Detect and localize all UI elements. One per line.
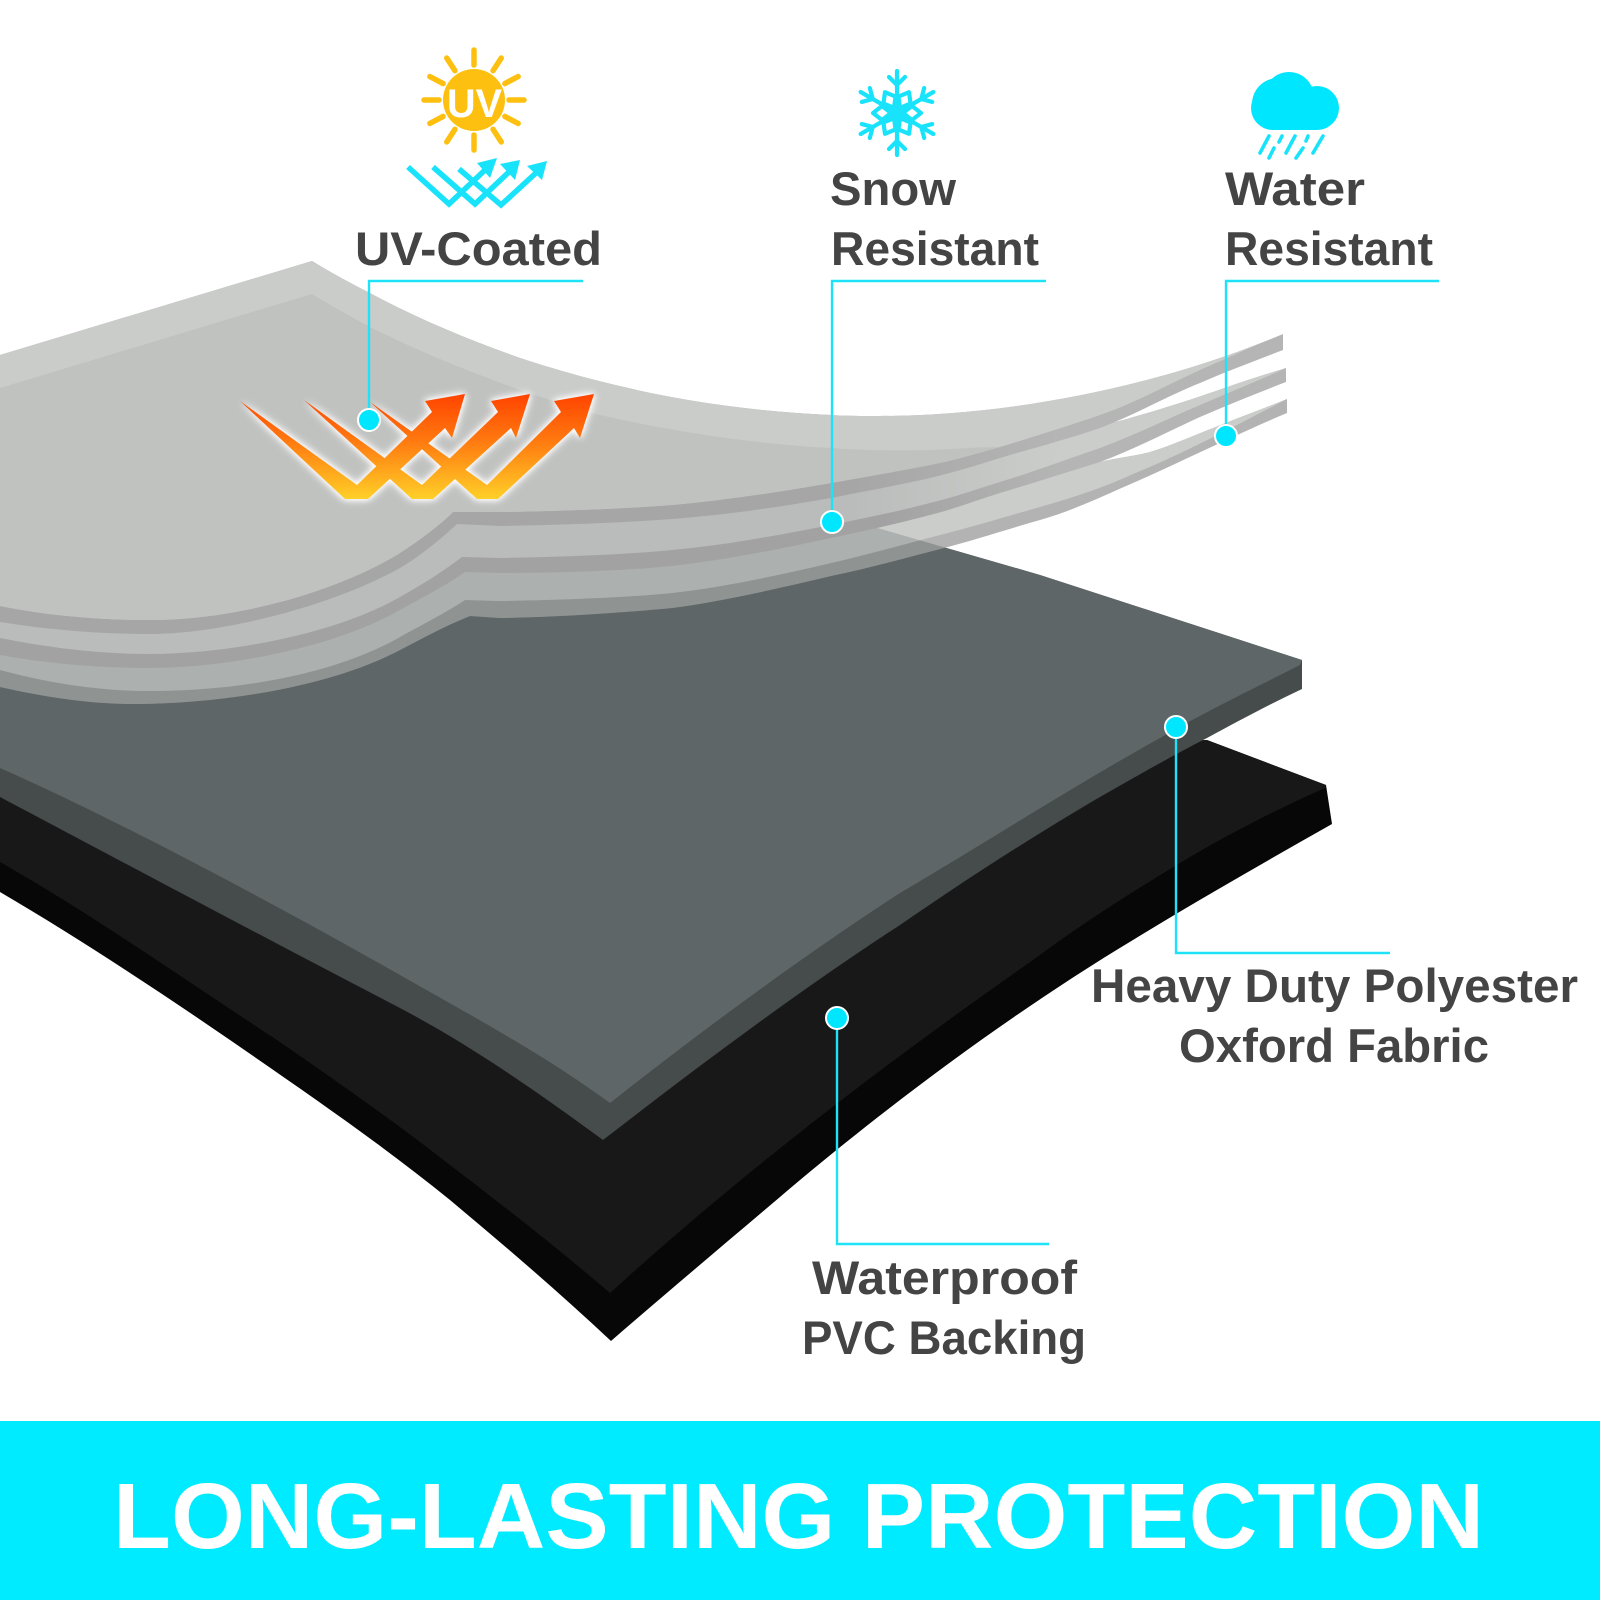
label: Heavy Duty Polyester Oxford Fabric: [1091, 959, 1578, 1072]
label: Water Resistant: Resistant: [1225, 222, 1433, 275]
label: Water Resistant: Water: [1225, 162, 1365, 215]
label: Waterproof PVC Backing: [802, 1251, 1086, 1364]
callout: Water Resistant leader line: [1226, 281, 1439, 436]
label: Snow Resistant: [830, 162, 1039, 275]
grey polyester oxford layer: [0, 527, 1302, 1140]
translucent coating strand 3: [0, 399, 1287, 720]
icon: snowflake: [857, 71, 937, 155]
callout: Polyester leader line: [1176, 727, 1390, 953]
label: Snow Resistant: Resistant: [831, 222, 1039, 275]
label: Waterproof PVC Backing: PVC Backing: [802, 1311, 1086, 1364]
label: Heavy Duty Polyester Oxford Fabric: Heavy Duty Polyester: [1091, 959, 1578, 1012]
marker: snow resistant dot: [821, 511, 843, 533]
banner: long-lasting protection: [0, 1421, 1600, 1600]
marker: UV coating dot: [358, 409, 380, 431]
translucent coating strand 1 (top sheet): [0, 261, 1283, 634]
icon: UV sun: [424, 50, 524, 150]
marker: PVC dot: [826, 1007, 848, 1029]
marker: water resistant dot: [1215, 425, 1237, 447]
translucent coating strand 2: [0, 368, 1286, 668]
label: UV-Coated: UV-Coated: [355, 222, 602, 275]
icon: orange reflected UV arrows: [240, 394, 594, 499]
callout: PVC leader line: [837, 1018, 1049, 1244]
icon: UV sun: UV: [447, 82, 502, 126]
callout: Snow Resistant leader line: [832, 281, 1046, 522]
callout: UV-Coated leader line: [369, 281, 583, 420]
icon: rain cloud: [1251, 72, 1339, 158]
label: Snow Resistant: Snow: [830, 162, 956, 215]
black PVC backing layer: [0, 740, 1332, 1341]
label: Heavy Duty Polyester Oxford Fabric: Oxford Fabric: [1179, 1019, 1489, 1072]
icon: cyan reflected UV arrows: [408, 158, 547, 205]
label: Water Resistant: [1225, 162, 1433, 275]
banner: long-lasting protection: LONG-LASTING PROTECTION: [113, 1464, 1484, 1568]
label: Waterproof PVC Backing: Waterproof: [812, 1251, 1077, 1304]
marker: polyester dot: [1165, 716, 1187, 738]
